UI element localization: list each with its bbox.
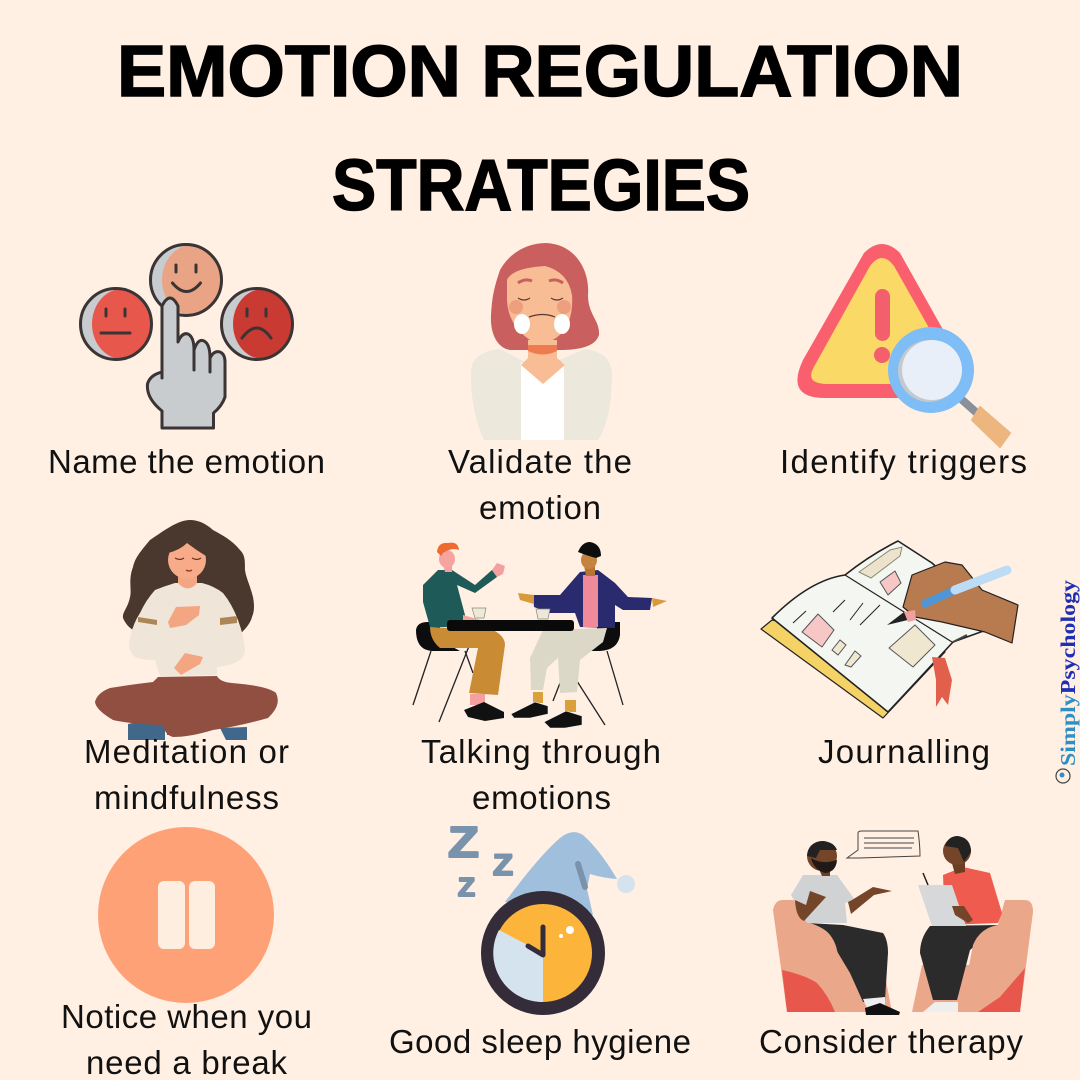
panel: consider therapy [759, 831, 1033, 1060]
panel: name the emotion [48, 244, 325, 480]
label [61, 998, 312, 1080]
icon: pause button [98, 827, 274, 1003]
icon: therapist and client in armchairs [773, 831, 1033, 1015]
title: EMOTION REGULATION [117, 32, 963, 112]
icon: meditating woman [95, 520, 278, 740]
panel: identify triggers [780, 244, 1027, 480]
label [448, 443, 632, 526]
label: Talking through [421, 733, 661, 770]
icon: open journal and writing hand [761, 541, 1018, 718]
label [84, 733, 289, 816]
label: Name the emotion [48, 443, 325, 480]
icon: clock wearing a sleeping cap: Z [458, 872, 475, 902]
icon: clock wearing a sleeping cap: Z [493, 849, 513, 882]
label [421, 733, 661, 816]
label: Notice when you [61, 998, 312, 1035]
panel: journalling [761, 541, 1018, 770]
label: mindfulness [94, 779, 279, 816]
label: emotions [472, 779, 611, 816]
label: Identify triggers [780, 443, 1027, 480]
panel: talking through emotions [413, 542, 667, 816]
panel: meditation or mindfulness [84, 520, 289, 816]
panel: notice when you need a break [61, 827, 312, 1080]
label: Consider therapy [759, 1023, 1024, 1060]
label: emotion [479, 489, 601, 526]
logo: Simply Psychology watermark: SimplyPsychology [1056, 579, 1080, 766]
title [117, 32, 963, 226]
icon: clock wearing a sleeping cap: Z [448, 818, 479, 867]
panel: good sleep hygiene [389, 818, 691, 1060]
label: Journalling [818, 733, 990, 770]
label: Validate the [448, 443, 632, 480]
label: need a break [86, 1044, 288, 1080]
icon: two people talking at a table [413, 542, 667, 728]
icon: emotion faces and pointing hand [80, 244, 293, 428]
icon: woman with tears [471, 243, 612, 440]
label: Meditation or [84, 733, 289, 770]
panel: validate the emotion [448, 243, 632, 526]
icon: warning triangle and magnifier [797, 244, 1010, 447]
title: STRATEGIES [332, 146, 750, 226]
label: Good sleep hygiene [389, 1023, 691, 1060]
icon: clock wearing a sleeping cap [448, 818, 635, 1008]
